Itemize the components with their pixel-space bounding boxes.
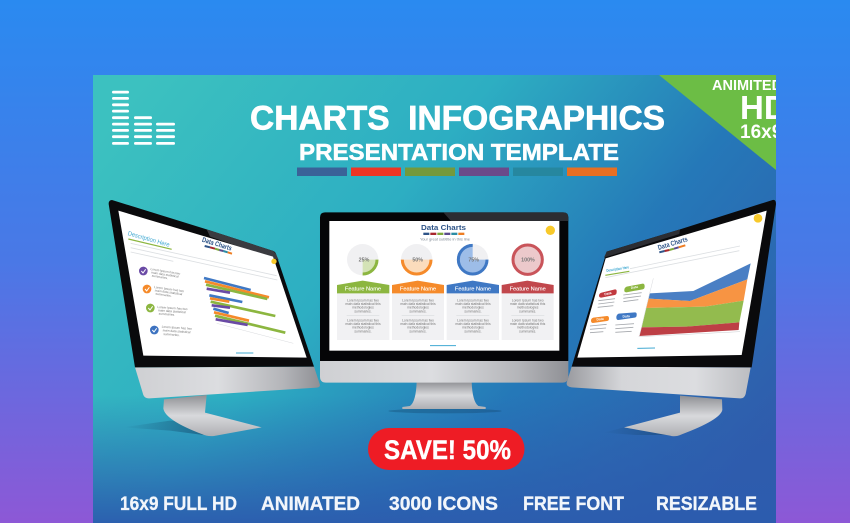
check list: main data statistical xyxy=(155,288,183,296)
stand shadow xyxy=(618,428,666,435)
feature labels xyxy=(120,493,757,515)
stand xyxy=(163,395,262,436)
feature column 2: Lorem Ipsum has two xyxy=(402,298,434,302)
check list: Lorem Ipsum has two xyxy=(157,305,188,311)
screen xyxy=(118,211,307,358)
feature labels: RESIZABLE xyxy=(656,493,757,515)
feature column 2: main data statistical this xyxy=(400,302,436,306)
subtitle: PRESENTATION TEMPLATE xyxy=(299,139,619,165)
feature column 3: Feature Name xyxy=(455,286,491,292)
slide paragraph xyxy=(605,246,740,278)
feature column 1 xyxy=(337,281,389,340)
monitor: left, bar chart slide xyxy=(109,200,320,436)
feature column 2: methodologies xyxy=(407,326,429,330)
check list xyxy=(139,267,192,337)
area chart xyxy=(639,263,751,337)
check list: Lorem Ipsum has two xyxy=(154,285,185,293)
check list: Lorem Ipsum has two xyxy=(150,267,181,276)
gauge 75%: 75% xyxy=(468,258,479,264)
check list: summaries. xyxy=(155,292,172,298)
badge xyxy=(271,259,277,264)
check list: main data statistical xyxy=(163,328,191,334)
bar chart xyxy=(204,278,293,343)
check list: summaries. xyxy=(152,274,168,280)
slide title: Data Charts xyxy=(421,223,466,232)
check list: summaries. xyxy=(163,332,180,337)
corner ribbon: animated HD 16x9: HD xyxy=(740,89,788,126)
slide heading: Description Here xyxy=(127,230,171,249)
gauge 100%: 100% xyxy=(521,258,535,264)
check list: summaries. xyxy=(159,312,175,317)
data pills xyxy=(590,284,645,333)
corner ribbon: animated HD 16x9: ANIMITED xyxy=(712,78,782,94)
badge xyxy=(546,226,555,235)
feature labels: 16x9 FULL HD xyxy=(120,493,237,515)
save badge xyxy=(368,428,524,470)
feature column 2: main data statistical this xyxy=(400,322,436,326)
feature labels: ANIMATED xyxy=(261,493,360,515)
feature column 4: summaries. xyxy=(519,310,536,314)
feature labels: FREE FONT xyxy=(523,493,624,515)
gauge 25% xyxy=(347,244,378,275)
check list: main data statistical xyxy=(158,308,186,314)
bezel xyxy=(109,200,314,367)
gauge 50%: 50% xyxy=(412,258,423,264)
data pills: Data xyxy=(630,285,638,290)
monitor: centre, feature columns slide xyxy=(320,212,568,413)
data pills: Data xyxy=(604,291,612,296)
feature column 2: Feature Name xyxy=(400,286,436,292)
icon: equalizer logo xyxy=(112,91,175,145)
stand xyxy=(402,382,486,409)
stand xyxy=(624,396,722,436)
feature column 4: methodologies xyxy=(517,306,539,310)
slide paragraph xyxy=(131,243,277,280)
feature column 4: methodologies xyxy=(517,326,539,330)
data pills: Data xyxy=(596,317,604,322)
feature column 2 xyxy=(392,281,444,340)
panel: main banner xyxy=(93,75,788,523)
slide colour strip xyxy=(423,233,464,235)
feature column 2: methodologies xyxy=(407,306,429,310)
description heading: Description Here xyxy=(606,264,630,273)
slide colour strip xyxy=(659,245,685,252)
gauge 25%: 25% xyxy=(359,258,370,264)
silver chin xyxy=(135,367,320,398)
feature column 2: summaries. xyxy=(409,310,427,314)
check list: main data statistical xyxy=(151,270,179,279)
monitor: left, bar chart slide: Data Charts xyxy=(201,237,233,253)
feature column 3: main data statistical this xyxy=(455,302,491,306)
colour strip xyxy=(297,168,617,176)
check list: Lorem Ipsum has two xyxy=(162,325,192,331)
feature column 1: Feature Name xyxy=(345,286,381,292)
feature column 4: main data statistical this xyxy=(510,322,546,326)
silver chin xyxy=(320,360,568,383)
feature column 3: summaries. xyxy=(464,330,482,334)
bezel xyxy=(320,212,568,361)
feature column 3: methodologies xyxy=(462,306,484,310)
feature column 4: Feature Name xyxy=(510,286,546,292)
data pills: Data xyxy=(622,314,630,319)
feature labels: 3000 ICONS xyxy=(389,493,498,515)
gauge 75% xyxy=(457,244,488,275)
feature column 4: summaries. xyxy=(519,330,536,334)
feature column 1: Lorem Ipsum has two xyxy=(347,298,379,302)
slide footer xyxy=(236,352,254,354)
corner ribbon: animated HD 16x9: 16x9 xyxy=(740,122,782,143)
feature column 2: Lorem Ipsum has two xyxy=(402,318,434,322)
feature column 4: Lorem Ipsum has two xyxy=(512,318,544,322)
gauge 50% xyxy=(401,244,432,275)
silver chin xyxy=(567,367,751,398)
slide colour strip xyxy=(205,246,232,254)
title: CHARTS INFOGRAPHICS xyxy=(250,100,665,138)
badge xyxy=(754,214,762,223)
monitor: right, area chart slide xyxy=(567,200,776,436)
feature column 3: summaries. xyxy=(464,310,482,314)
screen xyxy=(329,221,559,351)
feature column 4 xyxy=(502,281,554,340)
save badge: SAVE! 50% xyxy=(384,435,511,465)
feature column 3 xyxy=(447,281,499,340)
slide subtitle: Your great subtitle in this line xyxy=(420,238,470,242)
gauge 100% xyxy=(513,245,542,274)
feature column 4: main data statistical this xyxy=(510,302,546,306)
slide footer xyxy=(637,348,655,349)
stand shadow xyxy=(137,420,204,435)
feature column 3: Lorem Ipsum has two xyxy=(457,318,489,322)
feature column 1: methodologies xyxy=(352,306,374,310)
feature column 3: main data statistical this xyxy=(455,322,491,326)
feature column 1: summaries. xyxy=(354,310,372,314)
feature column 3: Lorem Ipsum has two xyxy=(457,298,489,302)
feature column 1: Lorem Ipsum has two xyxy=(347,318,379,322)
slide heading: Data Charts xyxy=(657,236,689,252)
screen xyxy=(577,211,767,358)
feature column 3: methodologies xyxy=(462,326,484,330)
feature column 2: summaries. xyxy=(409,330,427,334)
corner ribbon: animated HD 16x9 xyxy=(659,75,788,170)
slide footer xyxy=(430,344,456,347)
feature column 1: main data statistical this xyxy=(345,302,381,306)
feature column 1: methodologies xyxy=(352,326,374,330)
feature column 4: Lorem Ipsum has two xyxy=(512,298,544,302)
stand shadow xyxy=(388,409,502,413)
feature column 1: summaries. xyxy=(354,330,372,334)
feature column 1: main data statistical this xyxy=(345,322,381,326)
bezel xyxy=(572,200,776,367)
